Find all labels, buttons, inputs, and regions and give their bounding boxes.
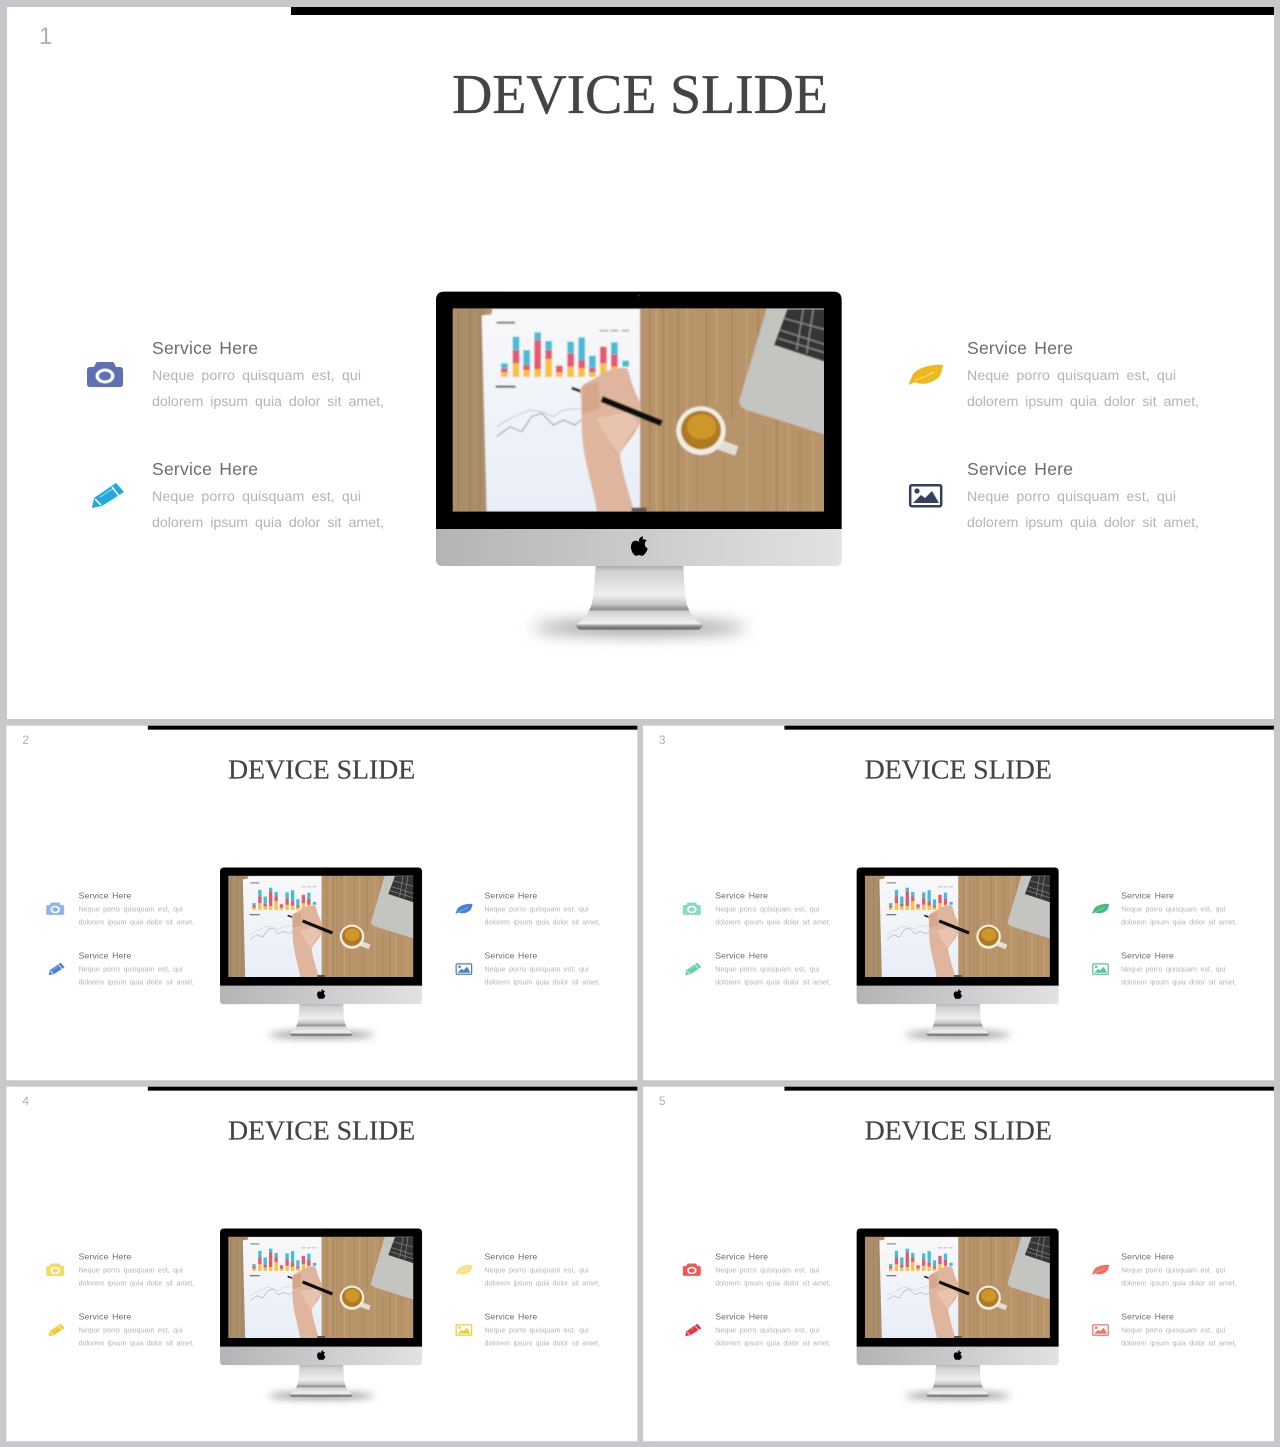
slide 4 top bar — [148, 1087, 637, 1091]
slide 3 service bottom right: Neque porro quisquam est, qui — [1121, 967, 1226, 974]
slide 4 service bottom left — [79, 1312, 194, 1348]
slide 4 number: 4 — [22, 1094, 29, 1108]
slide 5 service bottom left: dolorem ipsum quia dolor sit amet, — [715, 1341, 831, 1348]
slide 5 service bottom left — [715, 1312, 831, 1348]
slide 2 service bottom right: dolorem ipsum quia dolor sit amet, — [484, 980, 600, 987]
slide 1 number: 1 — [39, 23, 52, 50]
icon: camera — [683, 1263, 701, 1276]
slide 2 service bottom left: Service Here — [79, 951, 132, 961]
slide 5 service bottom right: Neque porro quisquam est, qui — [1121, 1328, 1226, 1335]
slide 3 service bottom left: Neque porro quisquam est, qui — [715, 967, 820, 974]
slide 2 service top right — [484, 890, 600, 926]
icon: pencil — [685, 1324, 701, 1336]
slide 3 monitor — [857, 867, 1059, 1038]
slide 3 number: 3 — [659, 733, 666, 747]
slide 4 service top left: dolorem ipsum quia dolor sit amet, — [79, 1280, 194, 1287]
icon: leaf — [1092, 904, 1109, 914]
slide 5 service top right: Service Here — [1121, 1251, 1174, 1261]
slide 4 service top left: Neque porro quisquam est, qui — [79, 1267, 183, 1274]
slide 4 service top right: Service Here — [484, 1251, 537, 1261]
slide 4 service bottom right: dolorem ipsum quia dolor sit amet, — [484, 1341, 600, 1348]
slide 3 service top left: Neque porro quisquam est, qui — [715, 906, 820, 913]
slide 2 title: DEVICE SLIDE — [228, 754, 415, 785]
slide 4 — [6, 1087, 637, 1441]
slide 5 service top right: dolorem ipsum quia dolor sit amet, — [1121, 1280, 1237, 1287]
icon: pencil — [49, 963, 65, 975]
icon: leaf — [909, 365, 943, 385]
slide 1 service bottom right — [967, 459, 1199, 531]
slide 2 service top right: dolorem ipsum quia dolor sit amet, — [484, 919, 600, 926]
slide 5 monitor — [857, 1228, 1059, 1399]
slide 1 service bottom right: dolorem ipsum quia dolor sit amet, — [967, 515, 1199, 531]
slide 1 service bottom left — [152, 459, 384, 531]
slide 4 service bottom right — [484, 1312, 600, 1348]
slide 5 service top right: Neque porro quisquam est, qui — [1121, 1267, 1226, 1274]
slide 3 service top right: Neque porro quisquam est, qui — [1121, 906, 1226, 913]
slide 1 title: DEVICE SLIDE — [452, 64, 828, 126]
slide 1 service top left: dolorem ipsum quia dolor sit amet, — [152, 394, 384, 410]
slide 2 service top left: dolorem ipsum quia dolor sit amet, — [79, 919, 194, 926]
slide 1 service bottom left: Neque porro quisquam est, qui — [152, 489, 361, 505]
slide 2 service bottom right: Neque porro quisquam est, qui — [484, 967, 589, 974]
slide 3 service top left: dolorem ipsum quia dolor sit amet, — [715, 919, 831, 926]
slide 3 service top left: Service Here — [715, 890, 768, 900]
slide 2 — [6, 726, 637, 1080]
slide 2 top bar — [148, 726, 637, 730]
icon: pencil — [49, 1324, 65, 1336]
slide 5 panel — [643, 1087, 1274, 1441]
icon: picture — [456, 1325, 472, 1335]
icon: camera — [683, 902, 701, 915]
slide 3 service bottom left: Service Here — [715, 951, 768, 961]
icon: picture — [910, 485, 941, 506]
icon: camera — [46, 902, 64, 915]
slide 1 monitor — [436, 292, 842, 633]
slide 5 — [643, 1087, 1274, 1441]
slide 4 service top left — [79, 1251, 194, 1287]
slide 4 panel — [6, 1087, 637, 1441]
slide 1 service top left — [152, 338, 384, 410]
icon: leaf — [456, 1265, 473, 1275]
slide 4 service bottom right: Service Here — [484, 1312, 537, 1322]
icon: leaf — [1092, 1265, 1109, 1275]
slide 1 service top left: Service Here — [152, 338, 258, 358]
slide 4 title: DEVICE SLIDE — [228, 1115, 415, 1146]
slide 4 service top right: Neque porro quisquam est, qui — [484, 1267, 589, 1274]
slide 1 service bottom left: Service Here — [152, 459, 258, 479]
slide 4 service top right: dolorem ipsum quia dolor sit amet, — [484, 1280, 600, 1287]
slide 3 service top left — [715, 890, 831, 926]
slide 2 service top left — [79, 890, 194, 926]
slide 2 service bottom left — [79, 951, 194, 987]
slide 1 service bottom right: Neque porro quisquam est, qui — [967, 489, 1176, 505]
slide 1 service top right: Service Here — [967, 338, 1073, 358]
slide 3 — [643, 726, 1274, 1080]
slide 5 service top left — [715, 1251, 831, 1287]
slide 5 service bottom right: Service Here — [1121, 1312, 1174, 1322]
slide 3 service top right: dolorem ipsum quia dolor sit amet, — [1121, 919, 1237, 926]
slide 5 service bottom left: Service Here — [715, 1312, 768, 1322]
slide 3 title: DEVICE SLIDE — [865, 754, 1052, 785]
slide 5 number: 5 — [659, 1094, 666, 1108]
slide 5 service top right — [1121, 1251, 1237, 1287]
slide 4 monitor — [220, 1228, 422, 1399]
slide 2 service top left: Neque porro quisquam est, qui — [79, 906, 183, 913]
slide 4 service top right — [484, 1251, 600, 1287]
slide 3 top bar — [784, 726, 1274, 730]
slide 2 service bottom right: Service Here — [484, 951, 537, 961]
slide 3 service bottom left — [715, 951, 831, 987]
slide 3 service bottom right — [1121, 951, 1237, 987]
slide 1 service top right — [967, 338, 1199, 410]
slide 5 service bottom right — [1121, 1312, 1237, 1348]
slide 4 service top left: Service Here — [79, 1251, 132, 1261]
slide 5 service top left: dolorem ipsum quia dolor sit amet, — [715, 1280, 831, 1287]
slide 4 service bottom left: dolorem ipsum quia dolor sit amet, — [79, 1341, 194, 1348]
slide 2 service top right: Neque porro quisquam est, qui — [484, 906, 589, 913]
slide 2 service top left: Service Here — [79, 890, 132, 900]
slide 3 service bottom left: dolorem ipsum quia dolor sit amet, — [715, 980, 831, 987]
slide 3 panel — [643, 726, 1274, 1080]
icon: picture — [1093, 964, 1108, 974]
slide 5 service bottom right: dolorem ipsum quia dolor sit amet, — [1121, 1341, 1237, 1348]
slide 1 service top right: Neque porro quisquam est, qui — [967, 368, 1176, 384]
slide 2 number: 2 — [22, 733, 29, 747]
slide 2 service bottom left: Neque porro quisquam est, qui — [79, 967, 183, 974]
slide 2 service bottom left: dolorem ipsum quia dolor sit amet, — [79, 980, 194, 987]
slide 2 monitor — [220, 867, 422, 1038]
slide 4 service bottom left: Neque porro quisquam est, qui — [79, 1328, 183, 1335]
slide 5 service top left: Neque porro quisquam est, qui — [715, 1267, 820, 1274]
icon: pencil — [92, 483, 124, 508]
slide 5 service bottom left: Neque porro quisquam est, qui — [715, 1328, 820, 1335]
slide 1 service bottom left: dolorem ipsum quia dolor sit amet, — [152, 515, 384, 531]
icon: pencil — [685, 963, 701, 975]
slide 1 service bottom right: Service Here — [967, 459, 1073, 479]
slide 1 top bar — [291, 7, 1274, 15]
icon: camera — [87, 362, 123, 387]
slide 3 service bottom right: Service Here — [1121, 951, 1174, 961]
icon: picture — [456, 964, 472, 974]
slide 2 service top right: Service Here — [484, 890, 537, 900]
slide 3 service bottom right: dolorem ipsum quia dolor sit amet, — [1121, 980, 1237, 987]
icon: picture — [1093, 1325, 1108, 1335]
slide 1 service top right: dolorem ipsum quia dolor sit amet, — [967, 394, 1199, 410]
slide 1 service top left: Neque porro quisquam est, qui — [152, 368, 361, 384]
slide 2 service bottom right — [484, 951, 600, 987]
slide 2 panel — [6, 726, 637, 1080]
slide 1 — [7, 7, 1274, 719]
slide 5 title: DEVICE SLIDE — [865, 1115, 1052, 1146]
slide 4 service bottom right: Neque porro quisquam est, qui — [484, 1328, 589, 1335]
slide 3 service top right — [1121, 890, 1237, 926]
icon: leaf — [456, 904, 473, 914]
slide 5 service top left: Service Here — [715, 1251, 768, 1261]
slide 4 service bottom left: Service Here — [79, 1312, 132, 1322]
slide 1 panel — [7, 7, 1274, 719]
icon: camera — [46, 1263, 64, 1276]
slide 5 top bar — [784, 1087, 1274, 1091]
slide 3 service top right: Service Here — [1121, 890, 1174, 900]
